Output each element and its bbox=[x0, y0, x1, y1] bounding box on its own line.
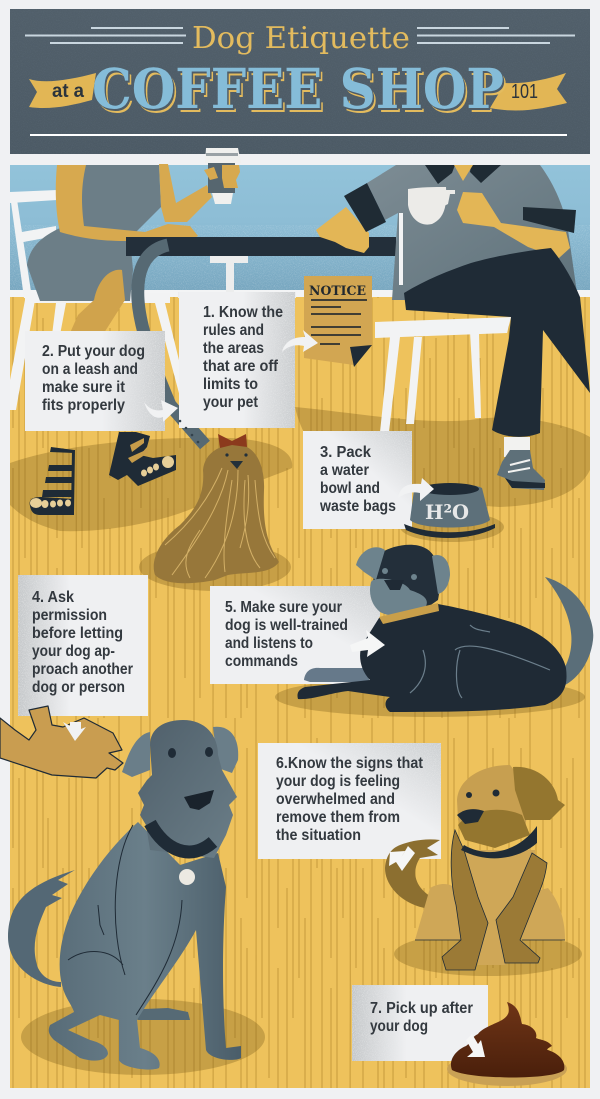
grey dog rear paw bbox=[122, 1008, 190, 1020]
right cuff bbox=[523, 207, 576, 233]
yorkie dog bbox=[154, 434, 279, 583]
card 1 text: the areas bbox=[203, 340, 264, 357]
arm holding cup bbox=[159, 164, 212, 222]
card 2 text: fits properly bbox=[42, 397, 125, 414]
grey dog ears bbox=[122, 732, 150, 777]
trousers bbox=[404, 248, 590, 437]
shirt bbox=[367, 165, 578, 300]
poop bbox=[447, 1002, 567, 1086]
card 3 text: a water bbox=[320, 462, 369, 479]
woman bbox=[27, 164, 212, 333]
card 5 text: and listens to bbox=[225, 635, 313, 652]
card 5 text: 5. Make sure your bbox=[225, 599, 342, 616]
card 5 text bbox=[225, 599, 348, 670]
card 6 text bbox=[276, 755, 424, 844]
arrow 7 bbox=[466, 1034, 485, 1057]
chair back strip bbox=[399, 213, 403, 285]
brown dog head bbox=[457, 765, 530, 840]
header banner bbox=[10, 9, 590, 154]
header bottom rule bbox=[30, 134, 567, 136]
brown dog haunches bbox=[415, 884, 462, 940]
card 4 text: 4. Ask bbox=[32, 589, 74, 606]
card 3: water bowl bbox=[303, 431, 412, 529]
card 3 text: 3. Pack bbox=[320, 444, 371, 461]
man bbox=[316, 165, 590, 437]
card 6: signs of overwhelm bbox=[258, 743, 441, 859]
brown dog bbox=[385, 765, 565, 970]
arrow 5 bbox=[350, 630, 385, 657]
card 4 text: permission bbox=[32, 607, 107, 624]
black dog outlines bbox=[410, 625, 550, 698]
card 2 text: on a leash and bbox=[42, 361, 138, 378]
takeaway coffee cup bbox=[204, 148, 241, 204]
arm on table bbox=[56, 165, 198, 241]
left cuff bbox=[344, 183, 386, 232]
black dog head bbox=[372, 545, 440, 616]
card 7 text: 7. Pick up after bbox=[370, 1000, 473, 1017]
dress bbox=[27, 165, 161, 301]
brown dog ear bbox=[513, 767, 565, 820]
black dog far paw bbox=[304, 668, 370, 682]
grey dog head bbox=[138, 720, 237, 858]
left arm and hand bbox=[316, 207, 369, 253]
water bowl bbox=[404, 483, 495, 538]
black dog bbox=[297, 545, 593, 712]
arrow 3 bbox=[398, 478, 434, 501]
table bbox=[126, 237, 396, 298]
woman's left sandal bbox=[30, 447, 75, 515]
card 6 text: your dog is feeling bbox=[276, 773, 400, 790]
black dog body bbox=[297, 604, 567, 712]
floor shadows bbox=[10, 407, 590, 1075]
card 4 text: before letting bbox=[32, 625, 123, 642]
right ribbon: 101: 101 bbox=[511, 81, 538, 103]
card 2: leash bbox=[25, 331, 165, 431]
right arm and hand bbox=[457, 192, 570, 258]
brown dog left leg bbox=[442, 830, 488, 970]
grey dog tag bbox=[179, 869, 195, 885]
grey dog nose bbox=[184, 790, 214, 810]
card 6 text: the situation bbox=[276, 827, 361, 844]
card 5 text: dog is well-trained bbox=[225, 617, 348, 634]
card 3 text: waste bags bbox=[319, 498, 396, 515]
scene: cafe sky background bbox=[10, 165, 590, 298]
toes bbox=[141, 456, 174, 476]
card 1 text: that are off bbox=[203, 358, 279, 375]
card 7 text bbox=[370, 1000, 473, 1035]
card 6 text: 6.Know the signs that bbox=[276, 755, 424, 772]
large grey dog bbox=[8, 720, 241, 1070]
black dog collar bbox=[379, 603, 439, 624]
card 2 text: make sure it bbox=[42, 379, 126, 396]
card 7: pick up bbox=[352, 985, 488, 1061]
collar bbox=[425, 165, 501, 184]
card 4 text bbox=[32, 589, 133, 696]
black dog tail bbox=[545, 577, 593, 685]
grey dog tail bbox=[8, 870, 75, 987]
arrow 2 bbox=[144, 400, 178, 422]
left ribbon: at a bbox=[29, 73, 96, 108]
card 1 text: limits to bbox=[203, 376, 258, 393]
card 5: well-trained bbox=[210, 586, 380, 684]
yorkie body bbox=[154, 445, 279, 583]
grey dog body bbox=[49, 822, 241, 1070]
yorkie hair strands bbox=[165, 468, 275, 578]
studded leash dots bbox=[179, 420, 199, 443]
man's sock and shoe bbox=[497, 437, 545, 490]
card 1: know the rules bbox=[179, 292, 295, 428]
leg bbox=[70, 270, 125, 333]
card 7 text: your dog bbox=[370, 1018, 428, 1035]
brown dog collar bbox=[461, 826, 537, 858]
title: Coffee Shop: COFFEE SHOP bbox=[94, 58, 506, 123]
arrow 4 bbox=[63, 722, 86, 741]
grey dog collar bbox=[150, 823, 213, 852]
card 4 text: dog or person bbox=[32, 679, 125, 696]
card 5 text: commands bbox=[225, 653, 298, 670]
brown dog muzzle bbox=[458, 810, 530, 848]
brown dog chest bbox=[460, 850, 536, 965]
title: Coffee Shop: COFFEE SHOP bbox=[95, 60, 507, 125]
notice sign bbox=[304, 276, 372, 367]
card 4 text: your dog ap- bbox=[32, 643, 115, 660]
brown dog nose bbox=[457, 809, 484, 824]
brown dog tail bbox=[385, 839, 440, 909]
arrow 6 bbox=[389, 846, 415, 871]
card 2 text: 2. Put your dog bbox=[42, 343, 145, 360]
woman's right sandal bbox=[109, 432, 176, 486]
card 3 text bbox=[319, 444, 396, 515]
title: Coffee Shop: COFFEE SHOP bbox=[92, 56, 504, 121]
grey dog body lines bbox=[68, 825, 182, 1015]
coffee mug bbox=[408, 187, 455, 225]
yorkie bow bbox=[218, 434, 247, 448]
toes bbox=[30, 498, 71, 508]
card 1 text bbox=[203, 304, 283, 411]
hand on cup bbox=[204, 165, 240, 188]
card 2 text bbox=[42, 343, 145, 414]
card 4 text: proach another bbox=[32, 661, 133, 678]
black dog ears bbox=[356, 547, 385, 580]
card 1 text: your pet bbox=[203, 394, 259, 411]
man's chair bbox=[375, 317, 511, 432]
card 1 text: rules and bbox=[203, 322, 264, 339]
card 6 text: overwhelmed and bbox=[276, 791, 395, 808]
card 3 text: bowl and bbox=[320, 480, 380, 497]
yorkie nose bbox=[230, 461, 243, 469]
grey dog eyes bbox=[168, 747, 213, 758]
title: Dog Etiquette: Dog Etiquette bbox=[192, 21, 410, 56]
bowl label: H²O bbox=[425, 500, 469, 524]
woman's chair bbox=[10, 190, 188, 410]
title decorative lines right bbox=[417, 28, 575, 43]
card 4: ask permission bbox=[18, 575, 148, 716]
right ribbon: 101 bbox=[490, 73, 567, 111]
left ribbon: at a: at a bbox=[52, 81, 84, 102]
person's hand bbox=[0, 706, 123, 778]
scene: wooden floor bbox=[10, 297, 590, 1088]
card 6 text: remove them from bbox=[276, 809, 400, 826]
card 1 text: 1. Know the bbox=[203, 304, 283, 321]
leash bbox=[138, 245, 205, 445]
arrow 1 bbox=[282, 330, 318, 352]
black dog muzzle bbox=[370, 579, 427, 616]
table base bbox=[178, 256, 296, 298]
brown dog right leg bbox=[496, 853, 547, 963]
notice heading: NOTICE bbox=[309, 284, 366, 299]
title decorative lines left bbox=[25, 28, 186, 43]
notice lines bbox=[311, 300, 367, 344]
